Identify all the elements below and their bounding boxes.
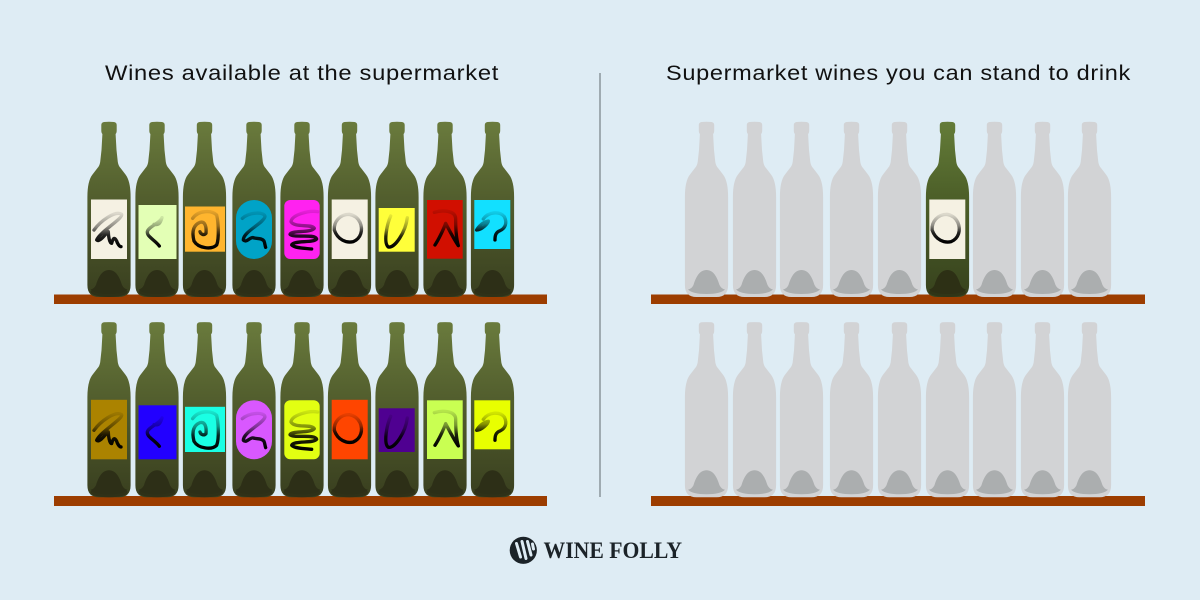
bottle 8 [423,322,467,497]
shelf: left bottom [54,496,547,506]
bottle 9 [471,322,514,497]
bottle 3 [183,322,226,497]
grey bottle 8 [1021,322,1064,497]
grey bottle 1 [685,322,728,497]
panel: all supermarket wines, top row [87,122,514,297]
bottle 2 [135,122,179,297]
bottle 7 [375,322,419,497]
bottle 2 [135,322,179,497]
grey bottle 2 [733,322,776,497]
bottle 8 [423,122,467,297]
bottle 6 [328,322,371,497]
shelf: left top [54,294,547,304]
bottle 3 [183,122,226,297]
wordmark: WINE FOLLY [544,538,682,563]
grey bottle 3 [780,322,823,497]
grey bottle 8 [1021,122,1064,297]
bottle 6 [328,122,371,297]
bottle 7 [375,122,419,297]
bottle 4 [232,322,276,497]
grey bottle 4 [830,322,873,497]
grey bottle 9 [1068,322,1111,497]
bottle 1 [87,322,131,497]
grey bottle 9 [1068,122,1111,297]
logo: Wine Folly [510,537,682,564]
grey bottle 1 [685,122,728,297]
divider [599,73,601,497]
panel: drinkable wines, top row [685,122,1111,297]
grey bottle 7 [973,322,1016,497]
bottle 9 [471,122,514,297]
grey bottle 3 [780,122,823,297]
highlighted bottle with cream label [926,122,969,297]
grey bottle 4 [830,122,873,297]
heading: right: Supermarket wines you can stand to drink [666,62,1131,85]
bottle 1 [87,122,131,297]
grey bottle 2 [733,122,776,297]
shelf: right top [651,294,1145,304]
grey bottle 6 [926,322,969,497]
bottle 5 [280,122,324,297]
icon: logo roundel [510,537,537,564]
grey bottle 5 [878,122,921,297]
grey bottle 7 [973,122,1016,297]
grey bottle 5 [878,322,921,497]
bottle 5 [280,322,324,497]
shelf: right bottom [651,496,1145,506]
panel: drinkable wines, bottom row [685,322,1111,497]
heading: left: Wines available at the supermarket [105,62,499,85]
panel: all supermarket wines, bottom row [87,322,514,497]
bottle 4 [232,122,276,297]
